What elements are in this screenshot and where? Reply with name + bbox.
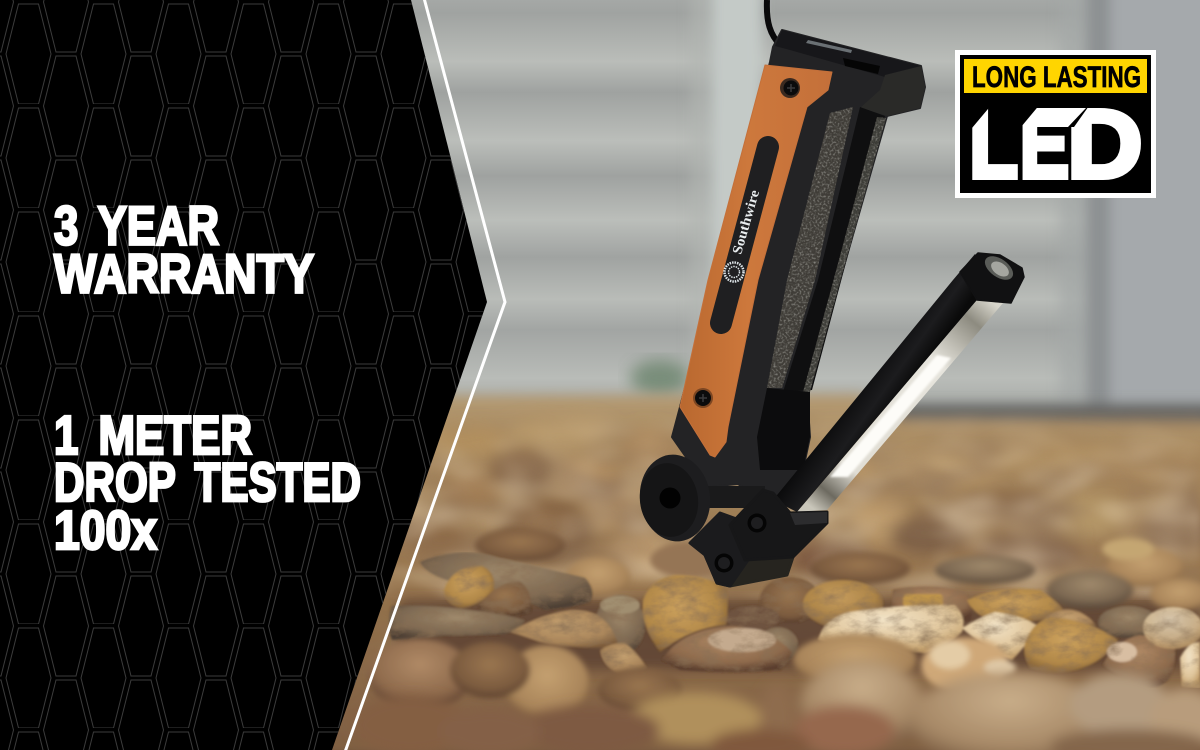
in-focus stones xyxy=(388,552,1200,688)
mid stones xyxy=(475,529,1200,611)
heading: 1 meter drop tested 100x: 100x xyxy=(54,499,157,561)
magnetic disc xyxy=(634,450,716,546)
photo background: house siding xyxy=(330,0,1200,440)
badge LED wordmark: E xyxy=(1020,91,1069,199)
badge LED wordmark: L xyxy=(969,89,1018,198)
heading: 3 year warranty xyxy=(54,194,314,304)
flashlight head xyxy=(960,251,1024,303)
badge LED wordmark xyxy=(969,89,1143,199)
shadows between stones xyxy=(400,600,1200,670)
heading: 1 meter drop tested 100x: DROP TESTED xyxy=(54,451,361,513)
top screw xyxy=(780,78,800,98)
left black panel with hexagon pattern xyxy=(0,0,487,750)
grip button recess xyxy=(721,147,768,323)
badge label: LONG LASTING xyxy=(972,61,1141,94)
heading: 1 meter drop tested 100x xyxy=(54,404,361,561)
orange grip xyxy=(680,65,832,457)
bottom screw xyxy=(693,388,713,408)
badge: long lasting LED xyxy=(955,50,1156,199)
hinge bracket xyxy=(690,490,827,586)
product: folding LED work light xyxy=(634,0,1024,586)
far blurred stones xyxy=(410,416,1200,579)
heading: 1 meter drop tested 100x: 1 METER xyxy=(54,404,252,466)
foreground blurred stones xyxy=(368,634,1016,721)
textured side panel xyxy=(767,107,853,388)
LED strip xyxy=(797,300,1003,512)
brand name: Southwire xyxy=(730,189,763,256)
hanging wire xyxy=(767,0,781,46)
handle body xyxy=(672,30,925,505)
white chevron outline xyxy=(345,0,505,750)
hinge bar xyxy=(705,486,765,508)
heading: 3 year warranty: WARRANTY xyxy=(54,242,314,304)
badge LED wordmark: D xyxy=(1067,91,1143,199)
arm tube xyxy=(773,254,1000,512)
heading: 3 year warranty: 3 YEAR xyxy=(54,194,219,256)
photo background: gravel ground xyxy=(320,394,1200,750)
LED wordmark chamfers xyxy=(966,103,1091,128)
brand logo xyxy=(724,262,744,282)
ground mottling xyxy=(388,426,1200,600)
